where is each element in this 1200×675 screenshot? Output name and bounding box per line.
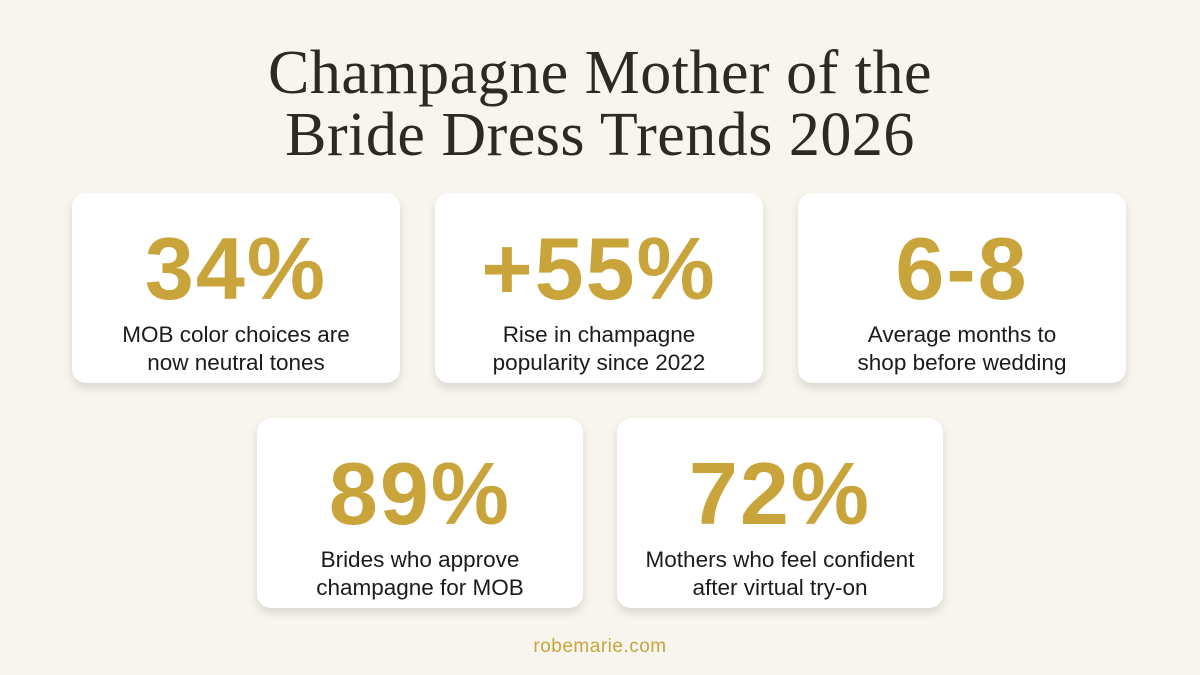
card: +55%: popularity since 2022 bbox=[493, 350, 705, 375]
card: 72%: Mothers who feel confident bbox=[646, 547, 914, 572]
card: 72%: after virtual try-on bbox=[692, 575, 868, 600]
card: 89% bbox=[257, 418, 583, 608]
card: +55%: Rise in champagne bbox=[503, 322, 695, 347]
footer: robemarie.com bbox=[533, 636, 667, 657]
title: Champagne Mother of the bbox=[268, 39, 932, 107]
card: 6-8 bbox=[798, 193, 1126, 383]
card: 89%: 89% bbox=[329, 444, 511, 543]
title: Bride Dress Trends 2026 bbox=[285, 101, 915, 169]
card: 89%: Brides who approve bbox=[321, 547, 519, 572]
card: 72%: 72% bbox=[689, 444, 871, 543]
card: 34% bbox=[72, 193, 400, 383]
card: +55%: +55% bbox=[481, 219, 717, 318]
card: 34%: now neutral tones bbox=[147, 350, 325, 375]
card: 6-8: 6-8 bbox=[895, 219, 1029, 318]
title bbox=[268, 39, 932, 169]
card: 6-8: Average months to bbox=[868, 322, 1056, 347]
card: 34%: 34% bbox=[145, 219, 327, 318]
card: 34%: MOB color choices are bbox=[122, 322, 350, 347]
card: 6-8: shop before wedding bbox=[858, 350, 1066, 375]
card: 72% bbox=[617, 418, 943, 608]
card: 89%: champagne for MOB bbox=[316, 575, 524, 600]
card: +55% bbox=[435, 193, 763, 383]
